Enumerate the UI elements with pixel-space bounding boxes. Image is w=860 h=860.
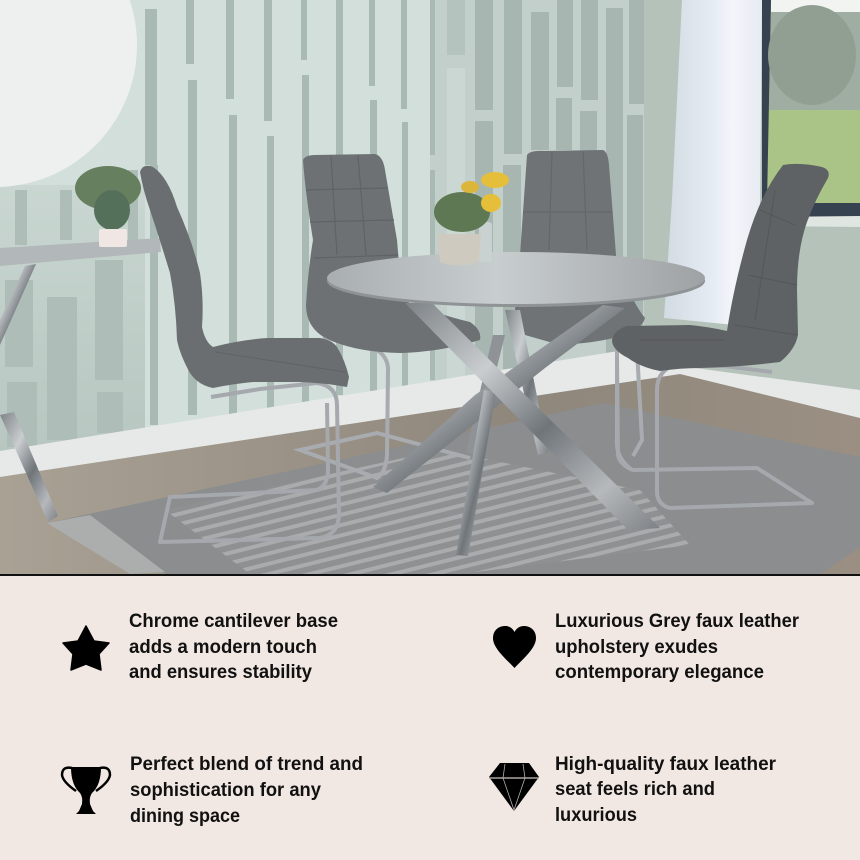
feature: grey faux leather bbox=[493, 611, 800, 683]
window bbox=[760, 0, 860, 227]
rug bbox=[47, 403, 860, 574]
curtain bbox=[664, 0, 762, 326]
room photo bbox=[0, 0, 860, 574]
text: grey faux leather: Luxurious Grey faux leather bbox=[555, 611, 800, 632]
text: high-quality seat: luxurious bbox=[555, 805, 637, 826]
divider line bbox=[0, 574, 860, 576]
floor bbox=[0, 374, 860, 574]
centrepiece bbox=[434, 172, 509, 266]
back chair bbox=[515, 150, 645, 470]
text: chrome base bbox=[129, 611, 338, 683]
feature: high-quality seat bbox=[489, 754, 777, 826]
text: high-quality seat: seat feels rich and bbox=[555, 779, 715, 800]
text: trend and sophistication: Perfect blend of trend and bbox=[130, 754, 363, 775]
table top bbox=[327, 252, 705, 307]
skirting board bbox=[0, 341, 860, 477]
far left chair bbox=[300, 154, 480, 478]
console table bbox=[0, 238, 161, 522]
table legs bbox=[373, 303, 660, 556]
near left chair bbox=[140, 166, 349, 542]
text: high-quality seat bbox=[555, 754, 777, 826]
text: grey faux leather: upholstery exudes bbox=[555, 637, 718, 658]
text: trend and sophistication: sophistication for any bbox=[130, 780, 321, 801]
right wall bbox=[644, 0, 860, 392]
plant on console bbox=[75, 166, 141, 247]
right chair bbox=[612, 164, 829, 508]
text: chrome base: adds a modern touch bbox=[129, 637, 317, 658]
text: grey faux leather bbox=[555, 611, 800, 683]
icon: diamond bbox=[489, 763, 539, 811]
mirror bbox=[0, 0, 137, 187]
feature: trend and sophistication bbox=[62, 754, 363, 827]
feature: chrome base bbox=[63, 611, 338, 683]
text: chrome base: Chrome cantilever base bbox=[129, 611, 338, 632]
text: trend and sophistication bbox=[130, 754, 363, 827]
text: trend and sophistication: dining space bbox=[130, 806, 240, 827]
icon: heart bbox=[493, 626, 536, 668]
text: high-quality seat: High-quality faux leather bbox=[555, 754, 777, 775]
icon: trophy bbox=[62, 767, 110, 814]
panelled wall bbox=[0, 0, 646, 480]
text: grey faux leather: contemporary elegance bbox=[555, 662, 764, 683]
text: chrome base: and ensures stability bbox=[129, 662, 312, 683]
icon: star bbox=[63, 626, 109, 670]
